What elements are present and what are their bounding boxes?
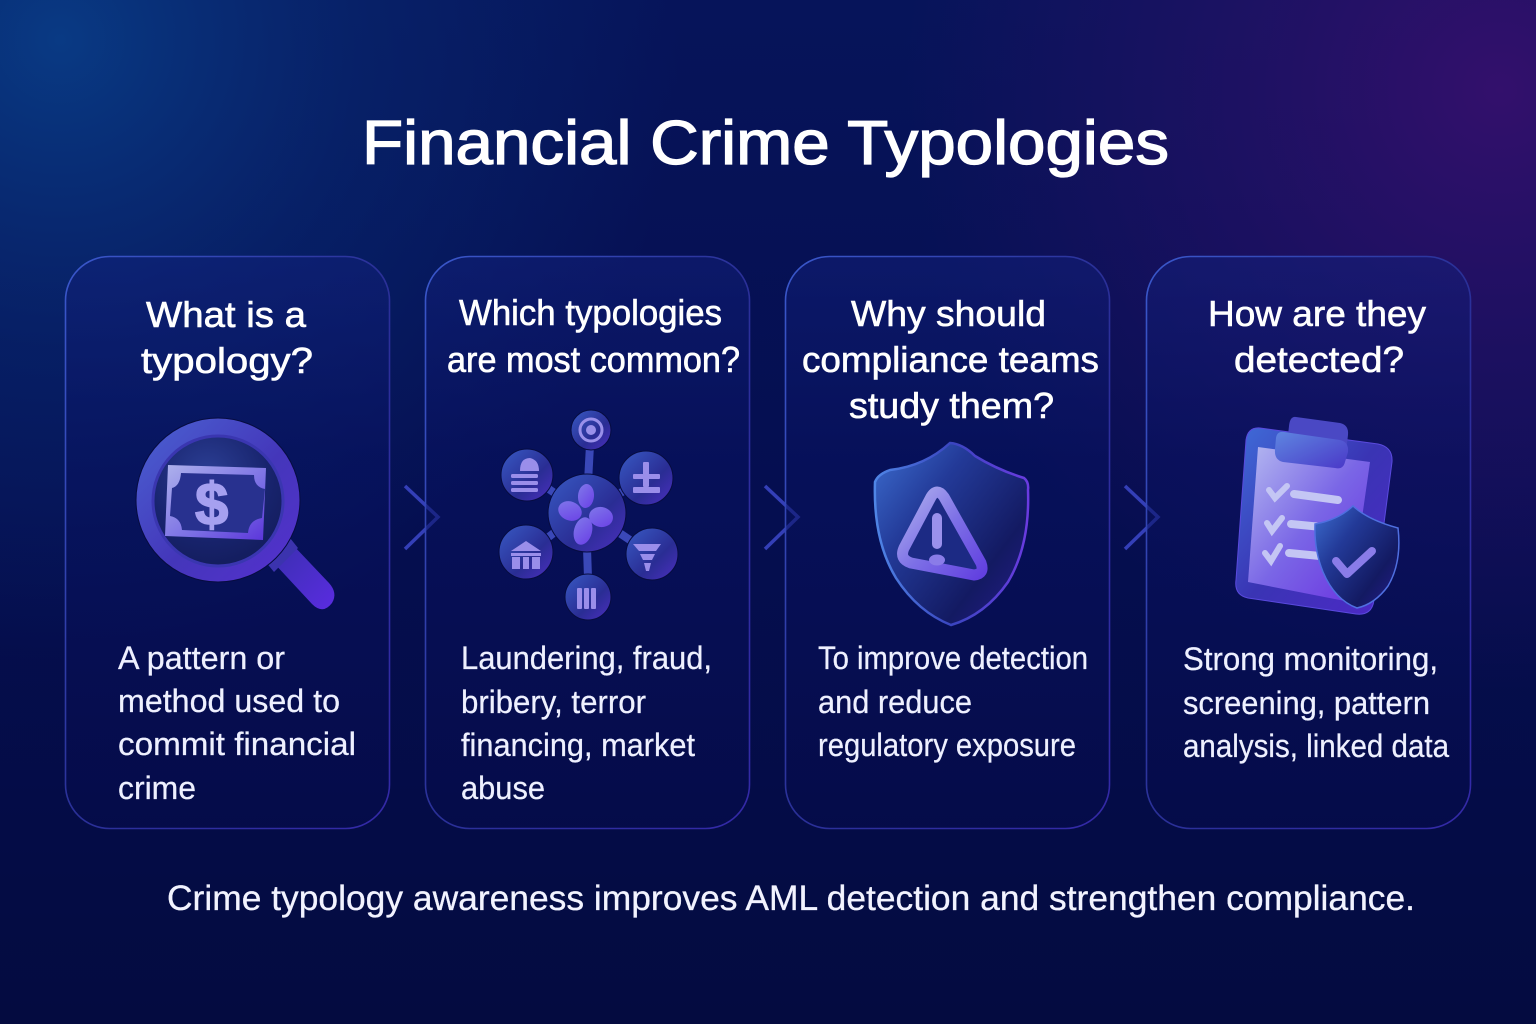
heading: what is a typology xyxy=(141,294,313,381)
body text: A pattern or xyxy=(118,640,285,676)
panel: common typologies xyxy=(426,256,750,828)
arrow 2 xyxy=(765,486,798,549)
body text: financing, market xyxy=(461,727,695,763)
heading: common typologies: are most common? xyxy=(447,339,740,380)
body text: crime xyxy=(118,770,196,806)
icon: magnifying glass with banknote xyxy=(136,418,334,609)
body text: screening, pattern xyxy=(1183,685,1430,721)
heading: why study them: study them? xyxy=(849,385,1054,426)
body text: regulatory exposure xyxy=(818,727,1076,763)
body text: method used to xyxy=(118,683,340,719)
body text: and reduce xyxy=(818,684,972,720)
panel: why study them xyxy=(786,256,1110,828)
arrow 1 xyxy=(405,486,438,549)
heading: why study them xyxy=(802,293,1099,426)
icon: clipboard with shield xyxy=(1236,417,1399,614)
body text xyxy=(461,640,712,806)
heading: why study them: Why should xyxy=(851,293,1046,334)
body text: analysis, linked data xyxy=(1183,728,1449,764)
body text xyxy=(118,640,356,806)
heading: how detected xyxy=(1208,293,1426,380)
footer statement: Crime typology awareness improves AML detection and strengthen compliance. xyxy=(167,879,1415,918)
icon: typology network xyxy=(499,410,678,620)
body text: commit financial xyxy=(118,726,356,762)
panel: what is a typology xyxy=(66,256,390,828)
heading: common typologies xyxy=(447,292,740,380)
heading: how detected: How are they xyxy=(1208,293,1426,334)
body text xyxy=(1183,641,1449,764)
body text: Laundering, fraud, xyxy=(461,640,712,676)
body text: abuse xyxy=(461,770,545,806)
arrow 3 xyxy=(1125,486,1158,549)
panel: how detected xyxy=(1146,256,1470,828)
body text: bribery, terror xyxy=(461,684,646,720)
body text xyxy=(818,640,1088,763)
heading: what is a typology: What is a xyxy=(146,294,307,335)
icon: shield with warning xyxy=(875,443,1028,625)
heading: common typologies: Which typologies xyxy=(459,292,722,333)
heading: why study them: compliance teams xyxy=(802,339,1099,380)
title: Financial Crime Typologies xyxy=(362,109,1169,178)
icon: magnifying glass with banknote: $ xyxy=(195,471,228,538)
heading: how detected: detected? xyxy=(1234,339,1404,380)
heading: what is a typology: typology? xyxy=(141,340,313,381)
body text: Strong monitoring, xyxy=(1183,641,1438,677)
body text: To improve detection xyxy=(818,640,1088,676)
